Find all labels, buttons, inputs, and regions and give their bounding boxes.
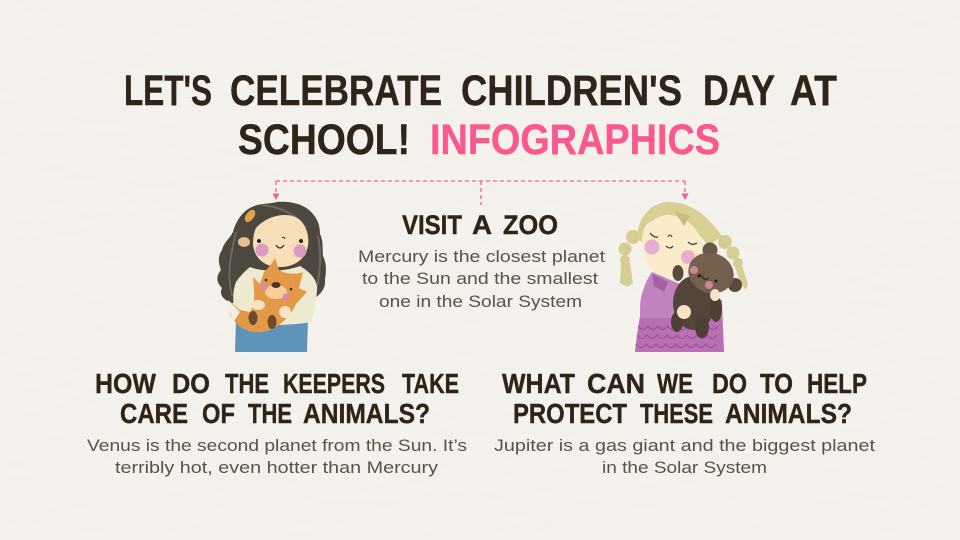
hands xyxy=(251,300,265,310)
text block: visit a zoo: to the Sun and the smallest xyxy=(362,269,598,288)
text block: keepers: HOW xyxy=(95,368,157,399)
title: AT xyxy=(790,67,837,115)
text block: keepers: THE xyxy=(248,398,292,429)
text block: protect xyxy=(494,368,875,477)
text block: keepers: CARE xyxy=(120,398,188,429)
title: CELEBRATE xyxy=(230,67,442,115)
dress xyxy=(635,272,724,352)
text block: protect: DO xyxy=(712,368,747,399)
text block: keepers: Venus is the second planet from the Sun. It’s xyxy=(87,436,467,455)
title: INFOGRAPHICS xyxy=(430,116,720,164)
hair clip xyxy=(243,208,257,224)
text block: protect: WE xyxy=(657,368,693,399)
text block: protect: WHAT xyxy=(502,368,575,399)
title: DAY xyxy=(703,67,775,115)
title xyxy=(124,67,837,164)
face xyxy=(253,215,308,267)
text block: protect: TO xyxy=(760,368,793,399)
text block: visit a zoo: ZOO xyxy=(503,210,558,240)
hair xyxy=(637,202,722,246)
title: CHILDREN'S xyxy=(461,67,682,115)
text block: protect: THESE xyxy=(640,398,713,429)
fox xyxy=(228,258,307,332)
text block: visit a zoo xyxy=(358,210,605,311)
title: LET'S xyxy=(124,67,212,115)
text block: protect: Jupiter is a gas giant and the biggest planet xyxy=(494,436,875,455)
hands xyxy=(677,305,691,319)
hair xyxy=(217,202,326,304)
text block: visit a zoo: one in the Solar System xyxy=(379,292,582,311)
text block: keepers: terribly hot, even hotter than Mercury xyxy=(115,458,439,477)
face xyxy=(642,215,703,277)
text block: keepers: ANIMALS? xyxy=(303,398,430,429)
illustration: girl hugging a teddy bear xyxy=(618,202,748,352)
ear xyxy=(238,237,250,247)
text block: visit a zoo: A xyxy=(472,210,492,240)
blouse xyxy=(233,266,317,325)
teddy bear xyxy=(702,242,718,258)
text block: visit a zoo: VISIT xyxy=(402,210,462,240)
text block: keepers: KEEPERS xyxy=(283,368,385,399)
text block: keepers: THE xyxy=(225,368,269,399)
cheeks and features xyxy=(644,240,660,254)
text block: keepers: TAKE xyxy=(402,368,459,399)
text block: keepers: DO xyxy=(172,368,210,399)
text block: protect: HELP xyxy=(807,368,867,399)
illustration: girl holding a fox xyxy=(217,202,326,352)
text block: keepers: OF xyxy=(202,398,235,429)
text block: protect: PROTECT xyxy=(513,398,627,429)
text block: visit a zoo: Mercury is the closest planet xyxy=(358,247,605,266)
skirt xyxy=(235,318,308,352)
title: SCHOOL! xyxy=(238,116,410,164)
text block: protect: ANIMALS? xyxy=(725,398,852,429)
cheeks and features xyxy=(256,244,268,256)
text block: protect: in the Solar System xyxy=(602,458,767,477)
braids xyxy=(618,230,748,290)
connector arrows xyxy=(272,181,688,205)
text block: protect: CAN xyxy=(587,368,645,399)
text block: keepers xyxy=(87,368,467,477)
fringe xyxy=(674,211,690,226)
